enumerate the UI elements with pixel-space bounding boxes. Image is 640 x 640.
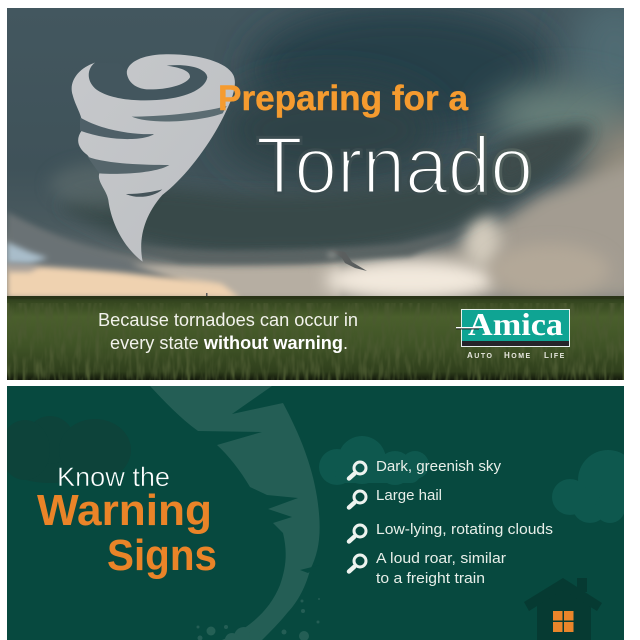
- logo: Amica: [456, 306, 570, 360]
- panel: warning signs: [0, 386, 638, 640]
- cloud: right: [552, 450, 624, 523]
- storm sky photo: [7, 0, 640, 300]
- subtitle: [98, 309, 358, 353]
- logo: Amica: Amica: [468, 306, 563, 342]
- logo: Amica: AUTO: [467, 351, 493, 360]
- dark cloud masses: [60, 128, 590, 255]
- logo: Amica: LIFE: [544, 351, 566, 360]
- grass field photo: [7, 296, 624, 380]
- panel: photo header: [7, 0, 640, 380]
- heading: Signs: Signs: [107, 531, 217, 580]
- cloud: dark left: [0, 416, 131, 483]
- background tornado: [150, 386, 320, 640]
- list item: Dark, greenish sky: [349, 458, 501, 478]
- heading: Know the: Know the: [57, 462, 170, 492]
- peach horizon: [7, 264, 240, 298]
- list item: Large hail: [349, 487, 442, 508]
- list item: Low-lying, rotating clouds: Low-lying, rotating clouds: [376, 521, 553, 538]
- icon: tornado: [72, 54, 235, 262]
- cloud: upper list: [319, 436, 429, 485]
- list item: Large hail: Large hail: [376, 487, 442, 504]
- logo: Amica: HOME: [504, 351, 532, 360]
- icon: house: [524, 578, 602, 640]
- title: Preparing for a: Preparing for a: [218, 79, 469, 118]
- list item: Low-lying, rotating clouds: [349, 521, 553, 542]
- subtitle: every state without warning.: [110, 332, 348, 353]
- list item: A loud roar: to a freight train: [376, 570, 485, 587]
- list item: Dark, greenish sky: Dark, greenish sky: [376, 458, 501, 475]
- subtitle: Because tornadoes can occur in: [98, 309, 358, 330]
- heading: Warning: Warning: [37, 486, 212, 535]
- list item: A loud roar: A loud roar, similar: [376, 550, 506, 567]
- title: Tornado: Tornado: [256, 121, 533, 211]
- under-cloud light zone: [7, 160, 640, 300]
- list item: A loud roar: [349, 550, 506, 587]
